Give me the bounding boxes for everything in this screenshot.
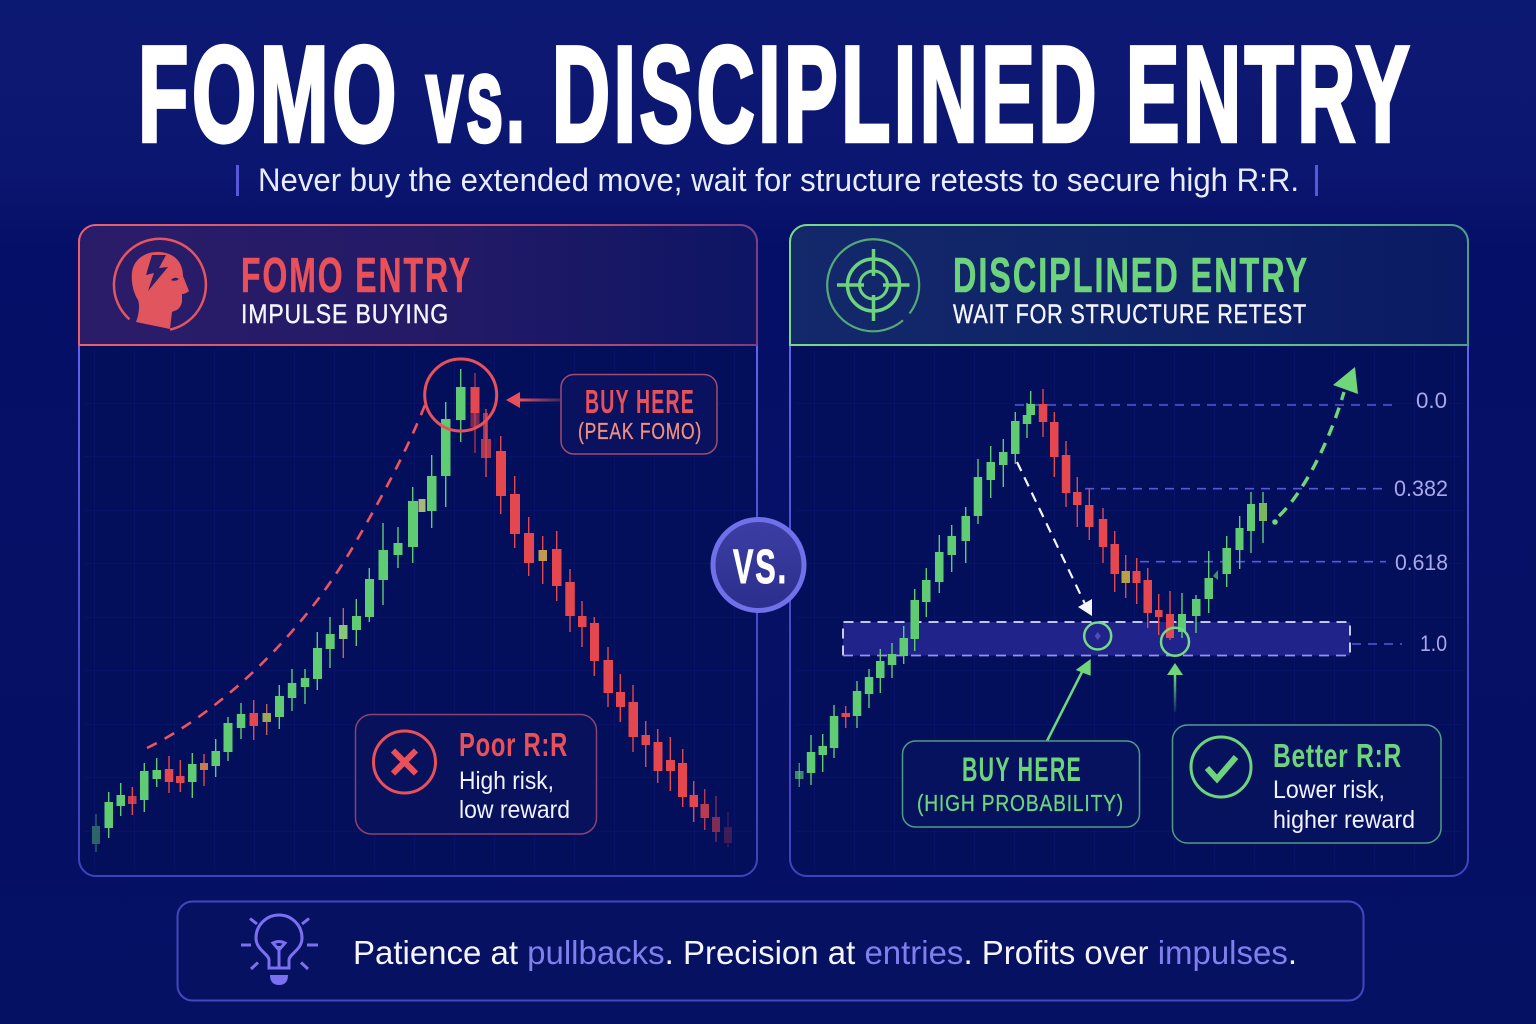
retest zone <box>843 622 1350 656</box>
title <box>138 18 1413 170</box>
icon: green check <box>1191 737 1251 797</box>
fibonacci labels: 0.618 <box>1395 550 1448 575</box>
icon: target <box>827 239 919 331</box>
green arrow up to retest <box>1167 663 1183 712</box>
VS badge: VS. <box>733 541 788 594</box>
retest markers <box>1084 622 1189 656</box>
arrow to peak <box>506 392 560 408</box>
peak highlight circle <box>425 359 497 431</box>
dashed trend line <box>147 405 425 748</box>
panel header: FOMO <box>79 225 757 345</box>
callout: buy here high probability <box>902 741 1140 827</box>
icon: red X <box>374 731 436 793</box>
callout: better R:R <box>1172 725 1441 843</box>
panel header: disciplined <box>790 225 1468 345</box>
green arrow to buy zone <box>1047 659 1091 741</box>
fibonacci level lines <box>1015 405 1402 644</box>
takeaway text: Patience at pullbacks. Precision at entries. Profits over impulses. <box>353 934 1297 971</box>
callout: poor R:R: low reward <box>459 796 570 824</box>
callout: buy here high probability: BUY HERE <box>962 751 1082 789</box>
icon: head with lightning bolt <box>114 239 206 330</box>
title: vs. <box>426 31 528 167</box>
white dashed pullback arrow <box>1017 462 1092 616</box>
subheading: wait for structure retest: WAIT FOR STRUCTURE RETEST <box>953 299 1307 329</box>
subtitle: Never buy the extended move; wait for structure retests to secure high R:R. <box>258 162 1299 198</box>
fibonacci labels: 0.382 <box>1394 476 1448 501</box>
callout: buy here high probability: (HIGH PROBABILITY) <box>917 790 1124 816</box>
callout: poor R:R: Poor R:R <box>459 726 568 763</box>
fibonacci labels: 1.0 <box>1420 631 1447 656</box>
callout: better R:R: higher reward <box>1273 806 1415 834</box>
callout: buy here peak FOMO: BUY HERE <box>585 383 695 420</box>
callout: poor R:R: High risk, <box>459 767 554 795</box>
panel: FOMO entry <box>79 225 757 876</box>
candlestick chart: pullback and recovery <box>795 389 1267 787</box>
title: FOMO <box>138 18 400 170</box>
callout: better R:R: Lower risk, <box>1273 776 1385 804</box>
callout: poor R:R <box>356 714 596 834</box>
bottom takeaway banner <box>178 902 1364 1000</box>
callout: buy here peak FOMO <box>561 374 717 454</box>
fibonacci labels: 0.0 <box>1416 388 1447 413</box>
VS badge <box>713 520 804 610</box>
fibonacci labels <box>1394 388 1448 656</box>
heading: FOMO Entry: FOMO ENTRY <box>241 249 472 303</box>
callout: better R:R: Better R:R <box>1273 737 1402 774</box>
subheading: impulse buying: IMPULSE BUYING <box>241 299 449 329</box>
panel: disciplined entry <box>790 225 1468 876</box>
green dashed target arrow <box>1272 367 1358 525</box>
candlestick chart: rise and collapse <box>92 369 732 852</box>
callout: buy here peak FOMO: (PEAK FOMO) <box>578 418 702 444</box>
heading: disciplined entry: DISCIPLINED ENTRY <box>953 249 1309 303</box>
icon: light bulb <box>241 915 318 985</box>
